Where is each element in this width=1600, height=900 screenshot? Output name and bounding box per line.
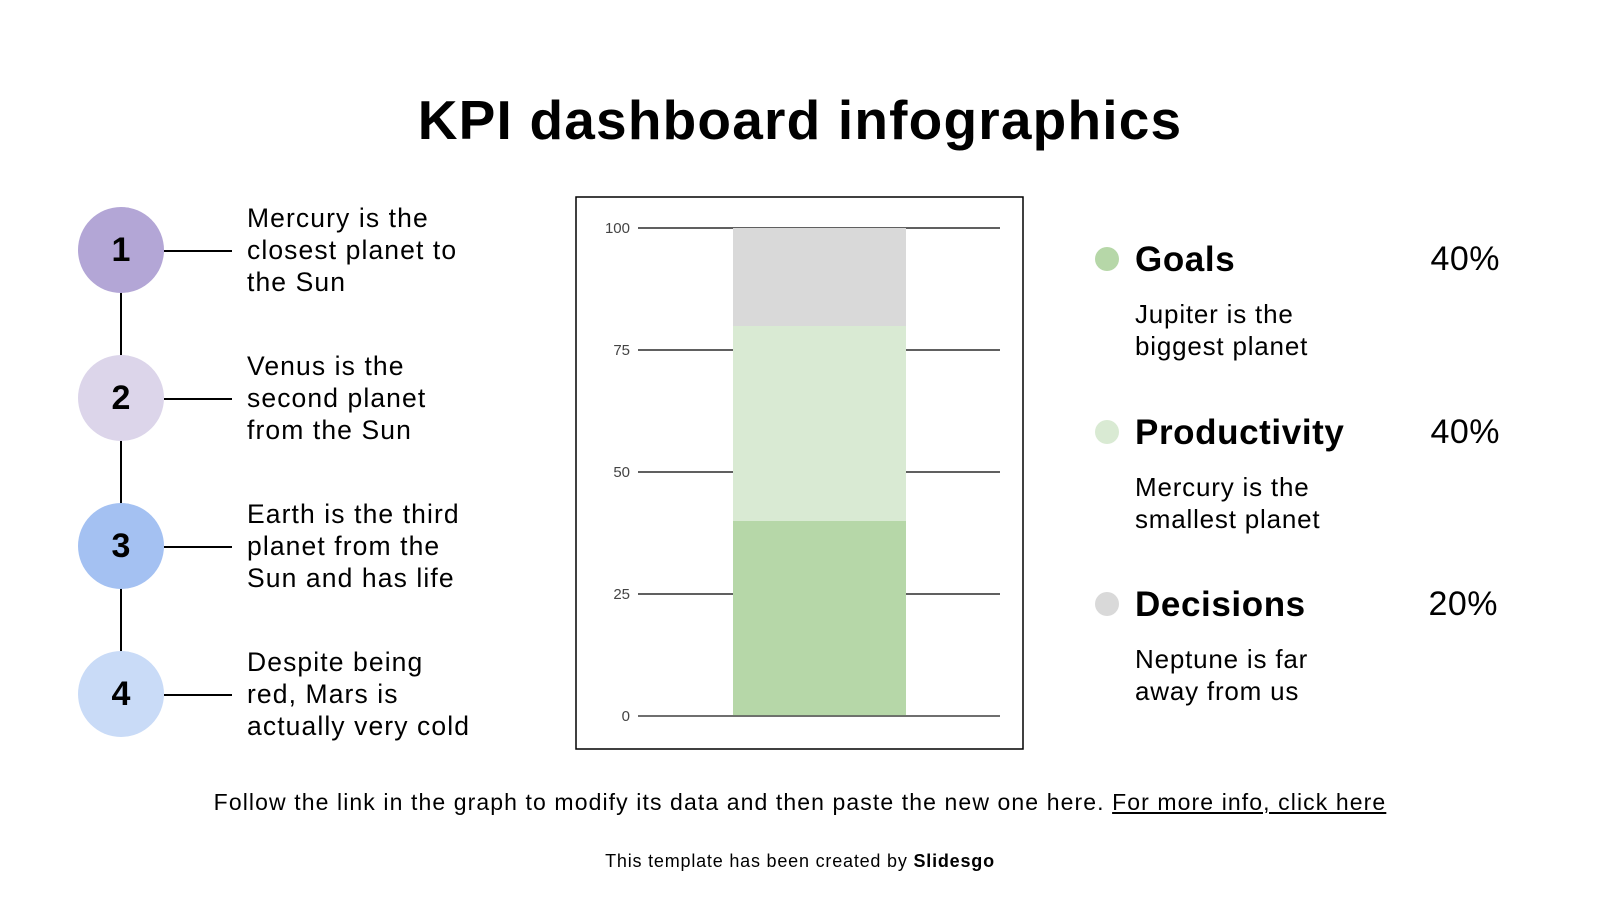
- chart: stacked bar: [575, 196, 1024, 750]
- chart: stacked bar: 100: [605, 220, 630, 237]
- legend: decisions: [1095, 585, 1498, 706]
- legend: productivity: smallest planet: [1135, 504, 1320, 534]
- legend: goals: Jupiter is the: [1135, 299, 1294, 329]
- text: Sun and has life: [247, 563, 455, 593]
- text: Venus is the: [247, 351, 405, 381]
- legend: decisions: 20%: [1428, 585, 1498, 623]
- legend: decisions: away from us: [1135, 676, 1299, 706]
- chart: stacked bar: 50: [613, 464, 630, 481]
- step 3: 3: [112, 527, 130, 565]
- text: Earth is the third: [247, 499, 460, 529]
- step 1: 1: [112, 231, 130, 269]
- legend: productivity: 40%: [1430, 413, 1500, 451]
- chart: stacked bar: 75: [613, 342, 630, 359]
- step 1: [78, 207, 164, 293]
- legend: goals: biggest planet: [1135, 331, 1308, 361]
- legend: productivity: [1095, 413, 1500, 534]
- legend: decisions: Decisions: [1135, 585, 1306, 624]
- legend: decisions: Neptune is far: [1135, 644, 1308, 674]
- text: actually very cold: [247, 711, 470, 741]
- legend: productivity: Mercury is the: [1135, 472, 1309, 502]
- legend: goals: [1095, 240, 1500, 361]
- text: planet from the: [247, 531, 440, 561]
- text: from the Sun: [247, 415, 412, 445]
- text: Mercury is the: [247, 203, 429, 233]
- legend: goals: Goals: [1135, 240, 1235, 279]
- chart: stacked bar: 25: [613, 586, 630, 603]
- legend: goals: 40%: [1430, 240, 1500, 278]
- chart: stacked bar: 0: [622, 708, 630, 725]
- text: closest planet to: [247, 235, 457, 265]
- timeline: [120, 292, 122, 652]
- legend: productivity: Productivity: [1135, 413, 1344, 452]
- step 2: 2: [112, 379, 130, 417]
- step 4: 4: [112, 675, 130, 713]
- text: second planet: [247, 383, 426, 413]
- credit: This template has been created by Slidesgo: [605, 851, 995, 871]
- step 3: [78, 503, 164, 589]
- text: the Sun: [247, 267, 346, 297]
- step 2: [78, 355, 164, 441]
- title: KPI dashboard infographics: [418, 89, 1182, 151]
- vertical connector: [120, 250, 122, 694]
- text: Despite being: [247, 647, 423, 677]
- text: red, Mars is: [247, 679, 399, 709]
- step 4: [78, 651, 164, 737]
- footer note: Follow the link in the graph to modify its data and then paste the new one here. For more info, click here: [214, 789, 1386, 815]
